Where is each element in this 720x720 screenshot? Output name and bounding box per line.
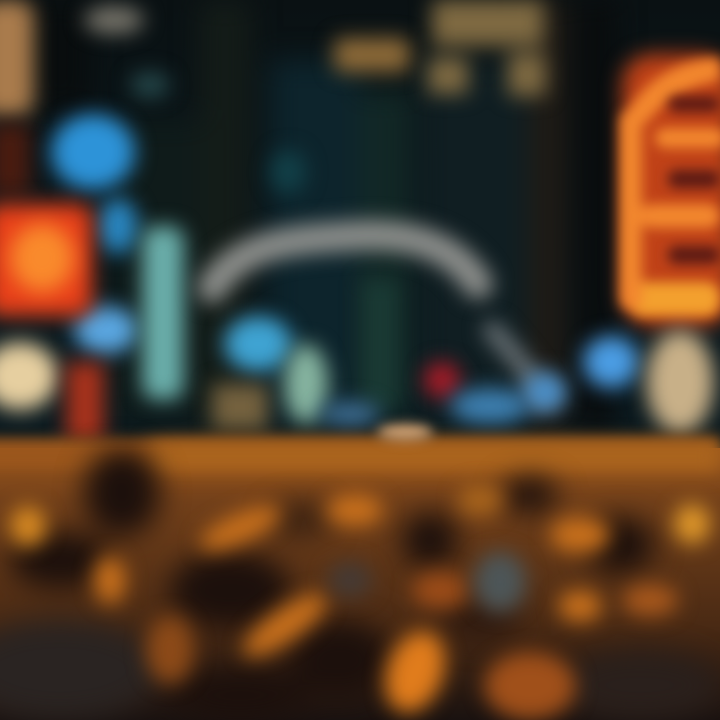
right blue light and pale lamp <box>583 330 714 434</box>
bright lamp and red column: lower left <box>0 342 104 442</box>
teal vertical sign <box>142 226 184 400</box>
left edge: tan building sign <box>0 0 34 194</box>
orange neon sign: right <box>620 54 720 326</box>
red-orange sign: left <box>0 204 92 316</box>
grey arch <box>212 235 545 400</box>
blue glowing lights: left cluster <box>51 114 138 354</box>
crowd: orange blurred foreground <box>0 424 720 720</box>
central street lights <box>212 280 567 430</box>
top signs: dim upper lights <box>84 0 546 194</box>
